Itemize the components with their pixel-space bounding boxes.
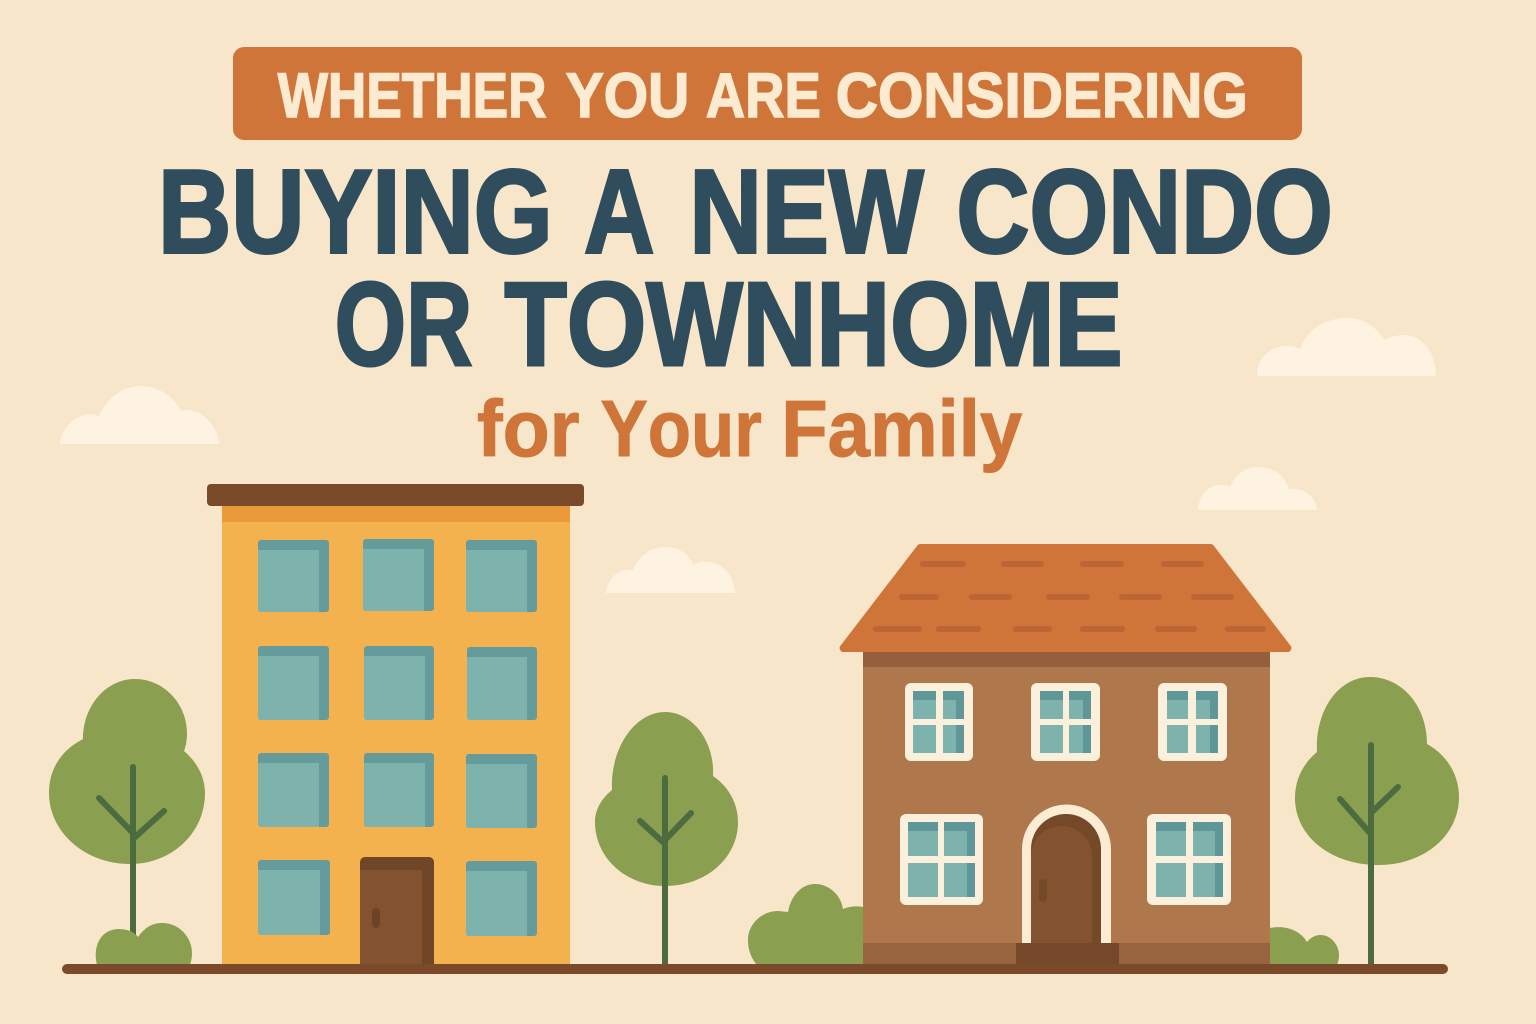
subtitle: for [477,384,580,473]
townhome [840,544,1291,965]
condo roof [207,484,584,506]
title: OR [335,257,472,391]
cloud: left [60,386,220,444]
title: TOWNHOME [504,259,1123,391]
banner: CONSIDERING [836,60,1248,130]
townhome wall [863,652,1270,965]
condo door [360,857,434,965]
townhome lower windows [900,814,1231,905]
subtitle [477,383,1022,474]
ground line [62,964,1448,974]
townhome roof [840,544,1291,652]
title [158,145,1333,391]
title: NEW [689,146,924,278]
tree: far right [1295,677,1459,965]
bush: right of townhome [1270,927,1339,965]
banner: YOU [566,60,689,131]
cloud: middle right [1198,467,1317,510]
bush: left of townhome [748,884,863,965]
condo building [207,484,584,965]
banner: ARE [706,61,821,131]
condo eave shadow [222,506,570,522]
townhome upper windows [905,683,1227,761]
subtitle: Your [600,385,762,474]
bush: under left tree [96,923,192,965]
townhome arched door [1022,804,1111,943]
townhome eave shadow [863,652,1270,667]
title: BUYING [158,146,553,278]
title: CONDO [956,146,1333,278]
cloud: center [606,547,735,593]
tree: center [595,712,738,965]
cloud: upper right [1257,318,1436,376]
title: A [584,145,654,279]
townhome base band [863,943,1270,965]
banner [233,47,1302,140]
tree: far left [49,679,205,935]
condo wall [222,506,570,965]
subtitle: Family [781,383,1022,473]
townhome door step [1016,943,1119,965]
condo windows [258,539,537,936]
banner: WHETHER [278,61,546,131]
